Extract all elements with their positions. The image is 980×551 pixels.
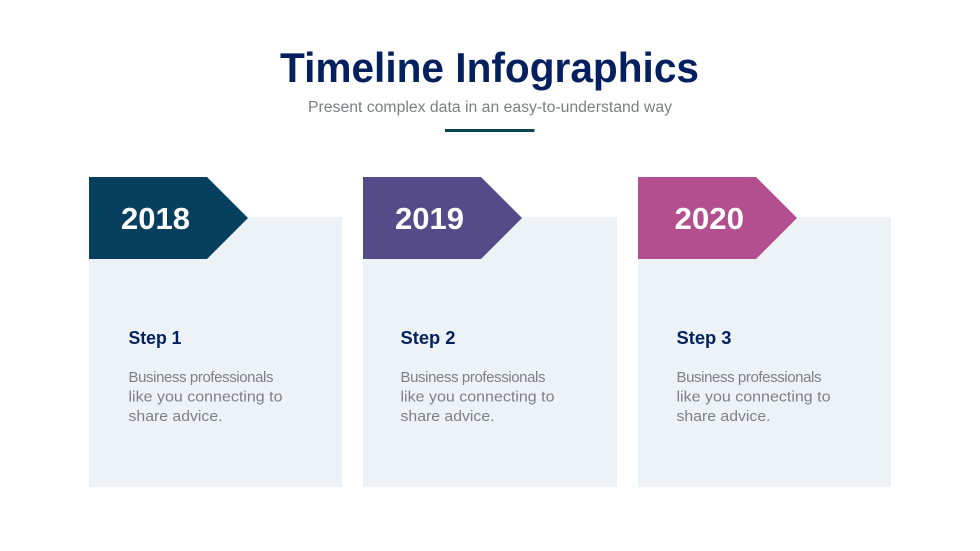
body text: step 3: [676, 369, 830, 425]
body text: step 3: like you connecting to: [676, 388, 830, 406]
card background: [363, 217, 617, 487]
panel: 2020 step 3: [638, 177, 891, 487]
year label: 2020: 2020: [674, 201, 744, 236]
title: Timeline Infographics: [280, 44, 699, 91]
panel: 2019 step 2: [363, 177, 617, 487]
arrow banner: 2020: [638, 177, 797, 259]
subtitle: Present complex data in an easy-to-understand way: [308, 99, 672, 116]
body text: step 3: share advice.: [676, 408, 770, 425]
arrow banner: 2018: [89, 177, 248, 259]
year label: 2019: 2019: [395, 201, 464, 236]
body text: step 2: like you connecting to: [400, 388, 554, 406]
step heading: Step 1: Step 1: [128, 327, 182, 348]
title underline: [445, 129, 534, 132]
year label: 2018: 2018: [121, 201, 190, 236]
card background: [89, 217, 342, 487]
panel: 2018 step 1: [89, 177, 342, 487]
body text: step 1: Business professionals: [128, 369, 274, 386]
body text: step 2: [400, 369, 554, 425]
card background: [638, 217, 891, 487]
step heading: Step 2: Step 2: [400, 327, 456, 348]
body text: step 1: [128, 369, 282, 425]
body text: step 1: share advice.: [128, 408, 222, 425]
body text: step 2: share advice.: [400, 408, 494, 425]
body text: step 3: Business professionals: [676, 369, 822, 386]
step heading: Step 3: Step 3: [676, 327, 732, 348]
body text: step 2: Business professionals: [400, 369, 546, 386]
body text: step 1: like you connecting to: [128, 388, 282, 406]
arrow banner: 2019: [363, 177, 522, 259]
